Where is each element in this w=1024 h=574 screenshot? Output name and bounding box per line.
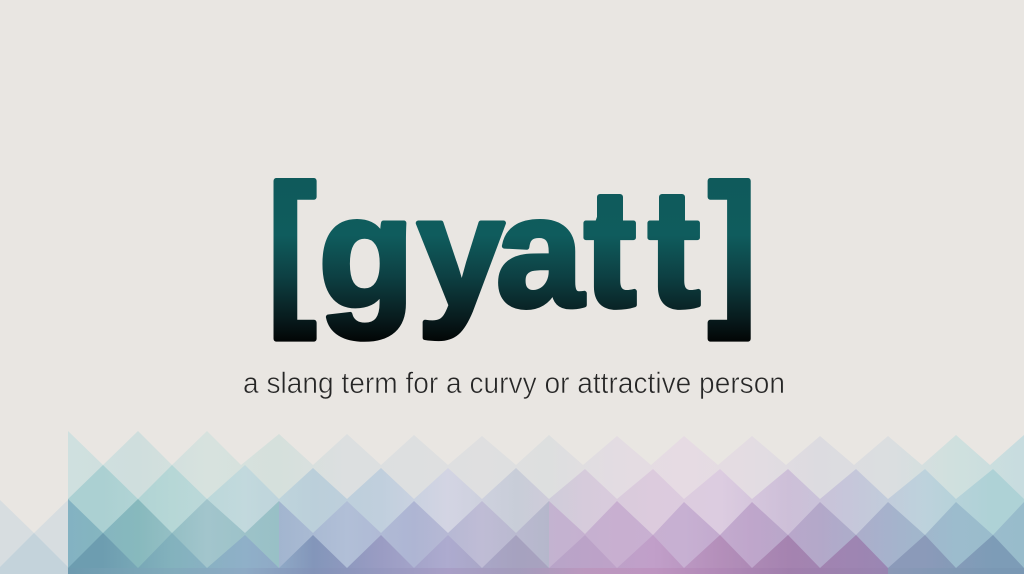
diamond row 3: [68, 499, 1024, 574]
diamond row 1: [68, 431, 1024, 574]
diamond row 2: [68, 465, 1024, 574]
subtitle: a slang term for a curvy or attractive person: [243, 367, 785, 400]
t stem extensions: [597, 194, 685, 224]
diamond pattern band: [0, 431, 1024, 574]
pale left diamond fragment: [0, 500, 68, 574]
diamond row 4: [68, 533, 1024, 574]
right bracket: ]: [708, 152, 756, 340]
diamond row 5: [68, 568, 1024, 574]
left bracket: [: [268, 152, 316, 340]
word: gyatt: [318, 165, 700, 340]
title: [gyatt]: [268, 152, 756, 340]
